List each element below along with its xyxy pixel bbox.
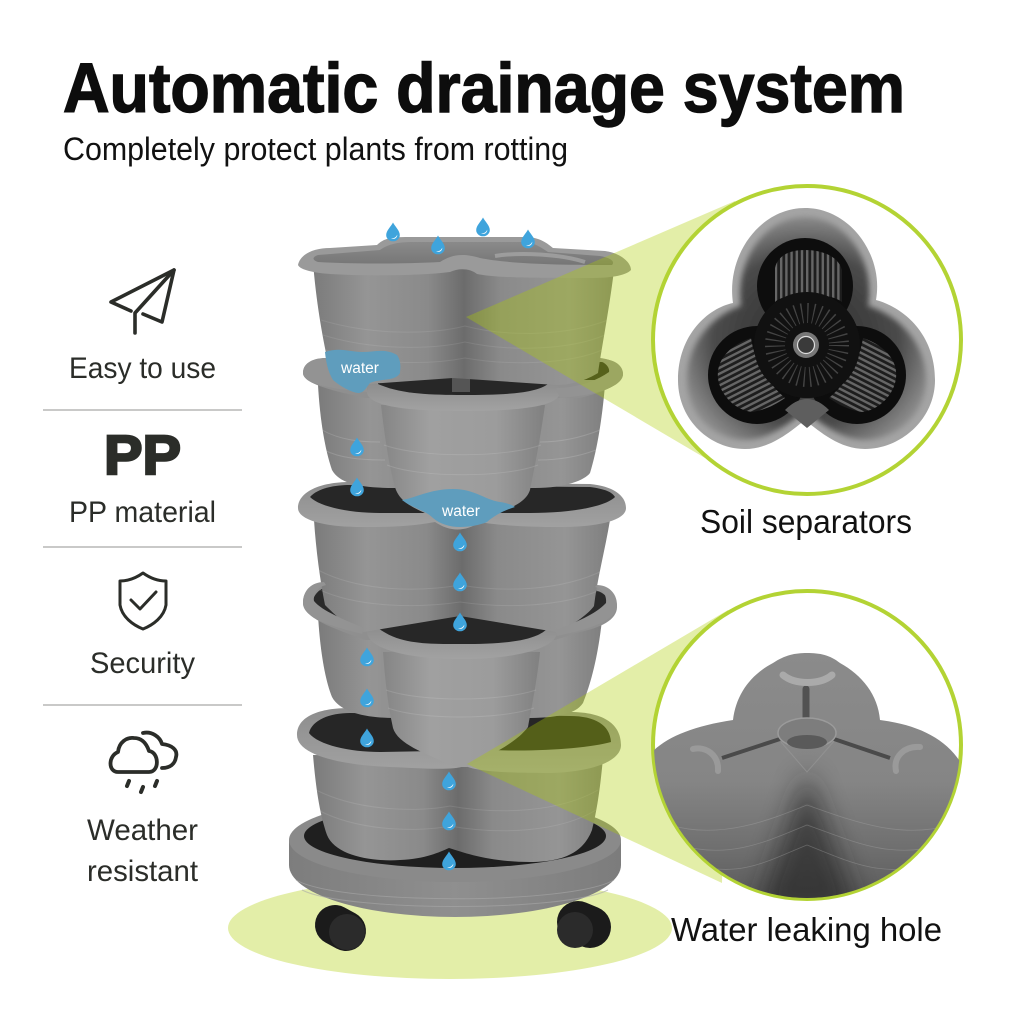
callout: soil separators (653, 186, 961, 494)
label: weather resistant (87, 814, 199, 888)
pot top view (678, 208, 935, 449)
highlight cone: leaking hole (467, 610, 728, 883)
label: security: Security (90, 647, 195, 680)
label: soil separators: Soil separators (700, 503, 912, 540)
tier 4 front pot (367, 612, 557, 767)
highlight cone: soil separators (466, 201, 735, 458)
tier 5 pots (297, 708, 621, 862)
tier 4 back pots (303, 582, 617, 718)
title: Automatic drainage system (63, 49, 905, 127)
label: water leaking hole: Water leaking hole (671, 911, 942, 948)
icon: shield check (120, 573, 166, 629)
label: weather resistant: resistant (87, 855, 199, 888)
wheels (329, 912, 593, 950)
planter tower (289, 218, 631, 950)
tray (289, 798, 621, 917)
icon: paper plane (111, 270, 174, 333)
water label top (325, 350, 400, 393)
label: weather resistant: Weather (87, 814, 198, 847)
icon: PP: PP (104, 423, 181, 486)
callout: water leaking hole (640, 591, 965, 915)
subtitle: Completely protect plants from rotting (63, 131, 568, 167)
water label top: water (340, 360, 379, 377)
water label middle (402, 489, 515, 527)
tier 1 pot (298, 237, 631, 398)
water label middle: water (441, 503, 480, 520)
ground ellipse (228, 877, 672, 979)
icon: rain clouds (110, 733, 176, 792)
label: easy to use: Easy to use (69, 352, 216, 385)
tier 2 front pot (367, 372, 560, 520)
panel: feature list (43, 270, 242, 888)
label: PP material: PP material (69, 496, 216, 529)
pot underside view (654, 653, 960, 898)
water drops (350, 218, 535, 870)
tier 3 pots (298, 482, 626, 636)
tier 2 back pots (303, 358, 623, 488)
